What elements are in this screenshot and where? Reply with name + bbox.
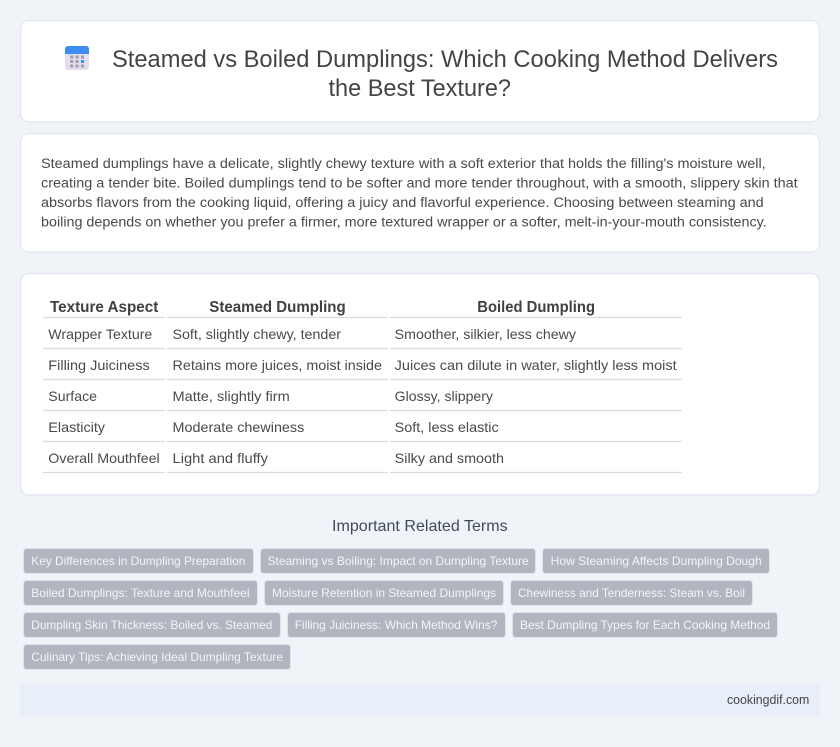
table row: overall mouthfeel: Overall Mouthfeel [48,450,160,466]
table row: wrapper texture: Soft, slightly chewy, tender [172,326,341,342]
title: the Best Texture? [328,75,511,102]
table row: filling juiciness: Juices can dilute in water, slightly less moist [395,357,677,373]
related term tags [24,548,778,670]
table row: surface: Matte, slightly firm [172,388,290,404]
text block: summary paragraph: Steamed dumplings have a delicate, slightly chewy texture with a soft exterior that holds the filling's moisture well, [41,156,766,172]
tag [24,548,254,574]
text block: summary paragraph: creating a tender bite. Boiled dumplings tend to be softer and more tender throughout, with a smooth, slippery skin that [41,175,798,191]
table row: surface [48,388,493,404]
table row: overall mouthfeel [48,450,504,466]
table header row [50,299,595,316]
tag [512,612,778,638]
tag [24,644,290,670]
tag: Best Dumpling Types for Each Cooking Method [520,618,770,632]
tag: Moisture Retention in Steamed Dumplings [272,586,496,600]
footer bar: cookingdif.com [727,693,809,707]
icon: calendar grid [65,46,89,70]
tag: Chewiness and Tenderness: Steam vs. Boil [518,586,745,600]
table row: overall mouthfeel: Light and fluffy [172,450,268,466]
table row: filling juiciness: Retains more juices, moist inside [172,357,382,373]
table row: overall mouthfeel: Silky and smooth [395,450,504,466]
tag: Boiled Dumplings: Texture and Mouthfeel [31,586,249,600]
tag: How Steaming Affects Dumpling Dough [551,554,762,568]
tag: Culinary Tips: Achieving Ideal Dumpling Texture [31,650,283,664]
table row: elasticity: Elasticity [48,419,105,435]
text block: summary paragraph: absorbs flavors from the cooking liquid, offering a juicy and flavorful experience. Choosing between steaming and [41,195,764,211]
table header row: Boiled Dumpling [477,299,595,316]
tag [24,612,280,638]
text block: summary paragraph: boiling depends on whether you prefer a firmer, more textured wrapper or a softer, melt-in-your-mouth consistency. [41,214,767,230]
tag [510,580,752,606]
tag [288,612,506,638]
panel: title card [20,20,820,122]
table row: elasticity [48,419,499,435]
tag [260,548,536,574]
tag: Key Differences in Dumpling Preparation [31,554,245,568]
table row: surface: Surface [48,388,97,404]
tag [24,580,258,606]
title [112,46,778,102]
table row: surface: Glossy, slippery [395,388,493,404]
table row: elasticity: Moderate chewiness [172,419,304,435]
table header row: Steamed Dumpling [209,299,346,316]
table row: wrapper texture: Wrapper Texture [48,326,153,342]
table header row: Texture Aspect [50,299,159,316]
table row: filling juiciness: Filling Juiciness [48,357,150,373]
tag: Dumpling Skin Thickness: Boiled vs. Steamed [31,618,272,632]
panel: comparison table [20,274,820,495]
tag [264,580,504,606]
heading: important related terms: Important Related Terms [332,518,508,535]
tag: Steaming vs Boiling: Impact on Dumpling Texture [268,554,529,568]
title: Steamed vs Boiled Dumplings: Which Cooking Method Delivers [112,46,778,73]
footer bar [20,683,820,717]
panel: summary text [20,134,820,252]
tag [542,548,770,574]
table row: filling juiciness [48,357,677,373]
table row: elasticity: Soft, less elastic [395,419,499,435]
tag: Filling Juiciness: Which Method Wins? [295,618,498,632]
table row: wrapper texture [48,326,576,342]
text block: summary paragraph [41,156,798,230]
table row: wrapper texture: Smoother, silkier, less chewy [395,326,576,342]
